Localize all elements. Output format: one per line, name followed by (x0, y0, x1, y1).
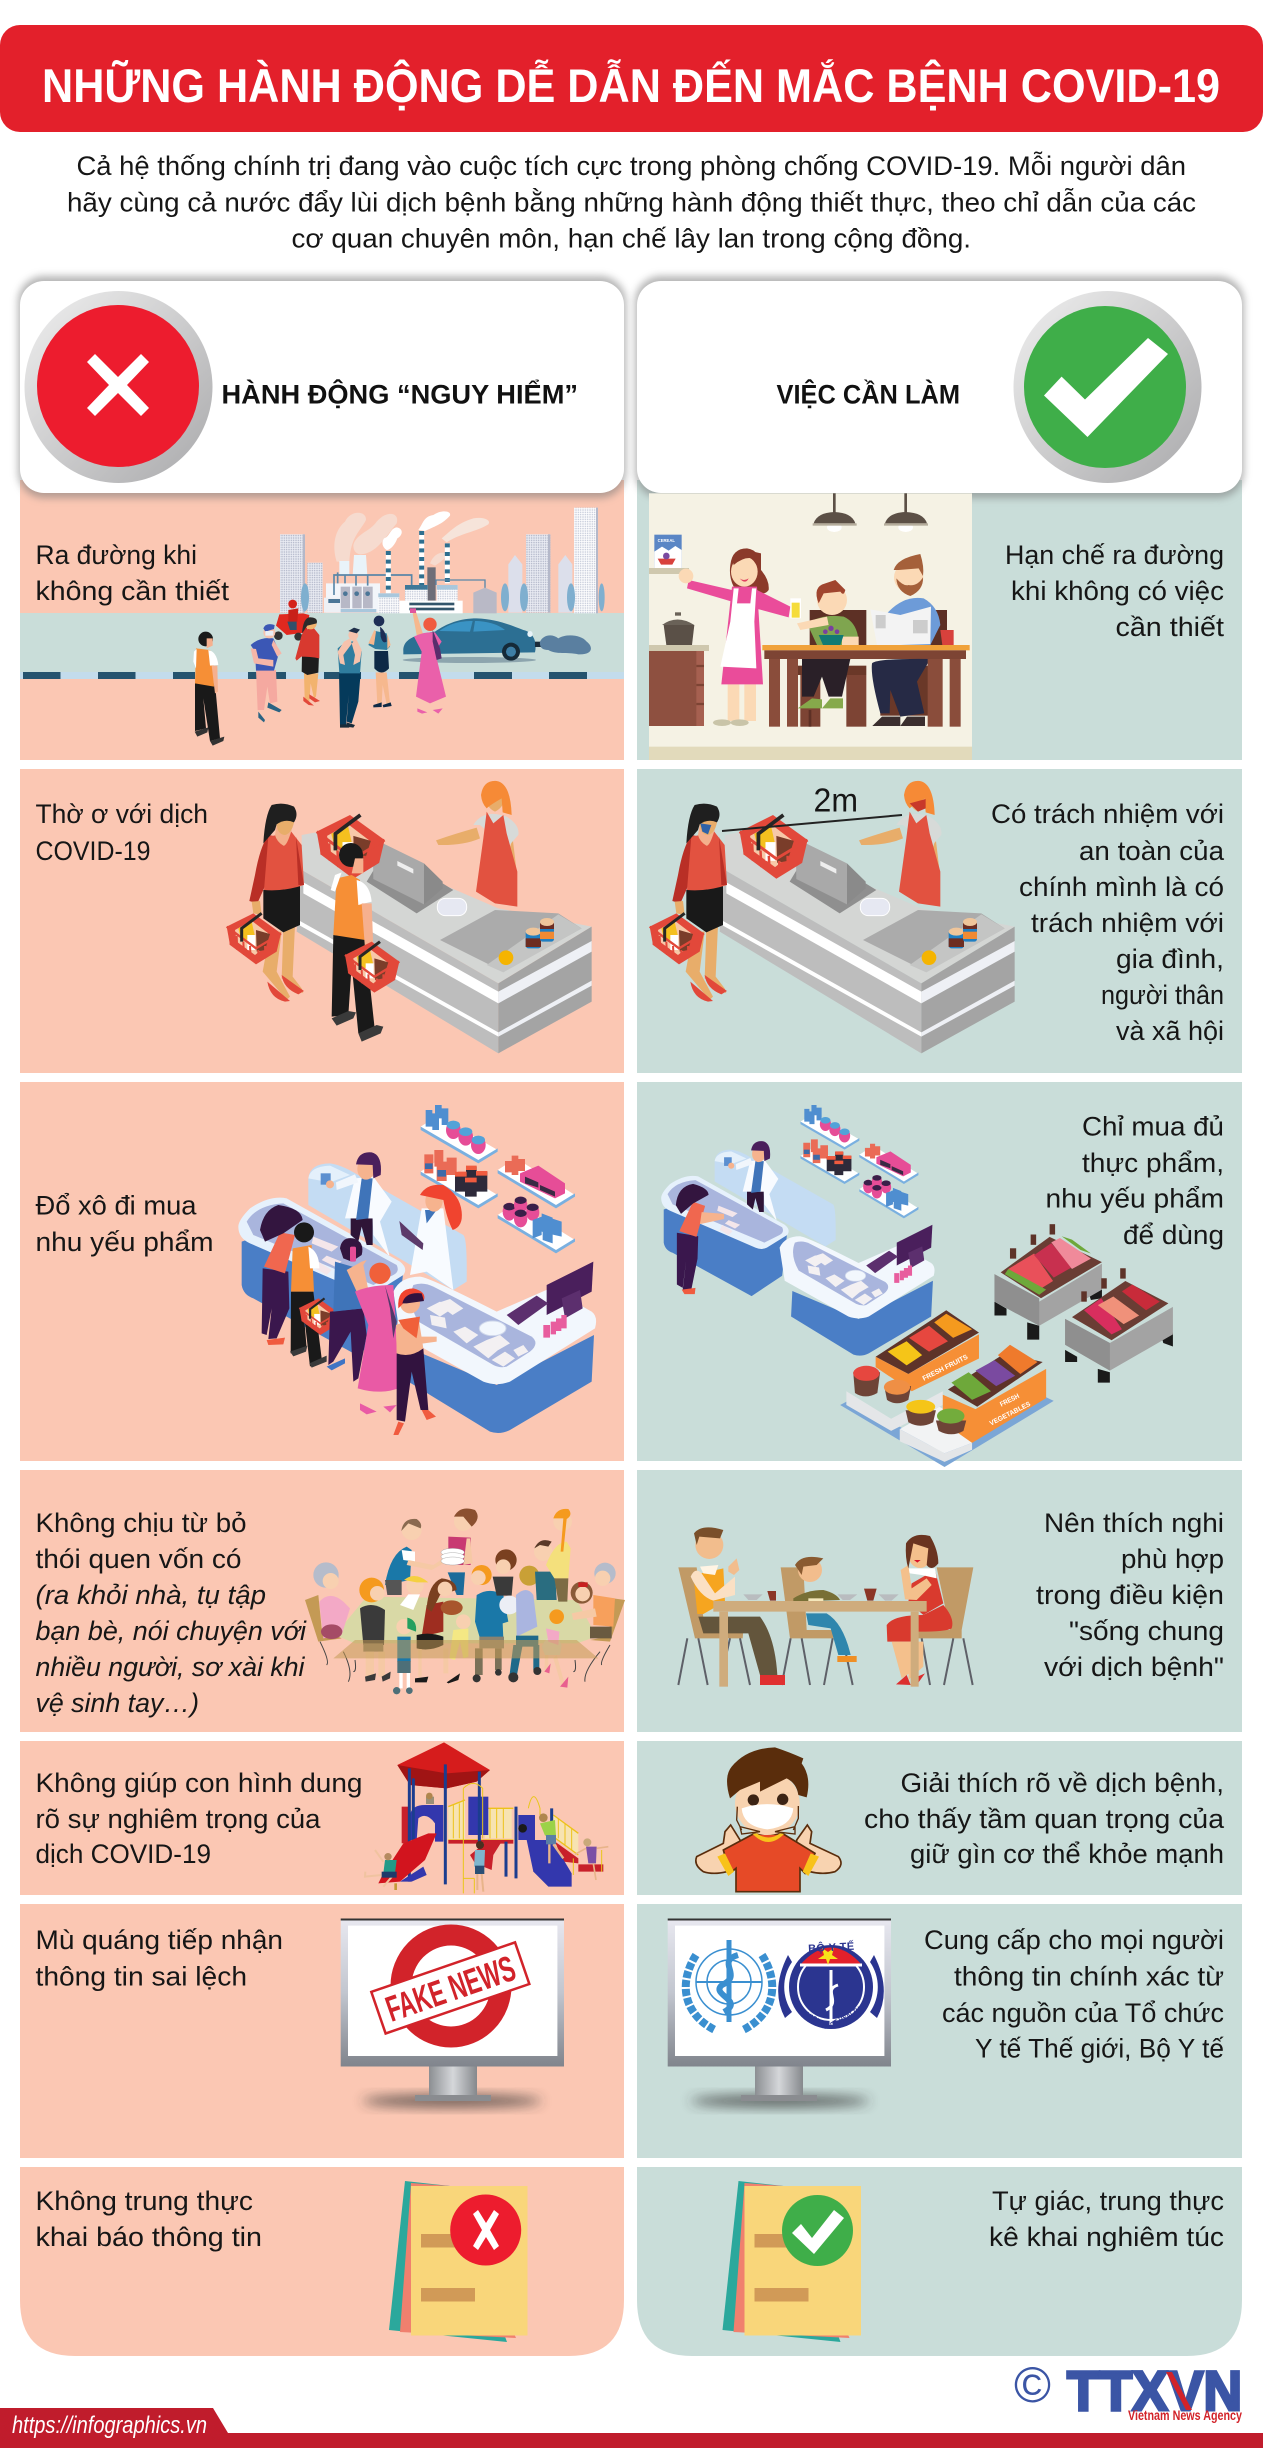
roof (397, 1742, 490, 1788)
illustration: big gathering around a table (305, 1508, 625, 1694)
pot and cabinet (649, 612, 709, 726)
footer bar (0, 2408, 1263, 2448)
butcher tables (994, 1224, 1173, 1383)
row 4 left text: bạn bè, nói chuyện với (36, 1616, 307, 1646)
health ministry logo (778, 1940, 884, 2032)
table and chairs (795, 610, 947, 727)
row 2 right text: và xã hội (1116, 1016, 1224, 1046)
row 3 left text: nhu yếu phẩm (36, 1227, 214, 1257)
row 2 left text: COVID-19 (36, 836, 150, 866)
row 4 left text: nhiều người, sơ xài khi (36, 1652, 305, 1682)
icon: declaration form with green check (722, 2181, 861, 2342)
checkout counter (720, 832, 1015, 1053)
tableware (743, 1589, 899, 1601)
head (735, 1772, 800, 1835)
row 4 left text: Không chịu từ bỏ (36, 1508, 246, 1538)
panel: left header card (18, 276, 626, 498)
table (713, 1601, 927, 1687)
fake news stamp (371, 1935, 529, 2037)
intro paragraph (67, 150, 1196, 254)
chairs and table (305, 1595, 625, 1682)
row 4 left text: thói quen vốn có (36, 1544, 242, 1574)
row 3 right text: thực phẩm, (1082, 1148, 1224, 1178)
mother in pink with apron (679, 548, 801, 726)
fresh produce stands: FRESH FRUITS (922, 1354, 970, 1383)
chairs (678, 1567, 973, 1638)
woman in dark red (415, 1578, 463, 1683)
woman with plates (441, 1508, 478, 1595)
masked man in teal shirt (338, 628, 362, 728)
pharmacy counters and shelves (238, 1105, 596, 1433)
intro paragraph: hãy cùng cả nước đẩy lùi dịch bệnh bằng những hành động thiết thực, theo chỉ dẫn của các (67, 186, 1196, 218)
woman in red top (295, 617, 320, 706)
row 4 right text: Nên thích nghi (1044, 1508, 1224, 1538)
blue stairs (527, 1840, 572, 1887)
row 4 left text: (ra khỏi nhà, tụ tập (36, 1580, 266, 1610)
row 3 right text: nhu yếu phẩm (1046, 1184, 1224, 1214)
mask (742, 1804, 793, 1829)
logo: TTXVN: © (1014, 2357, 1051, 2413)
row 5 right text: cho thấy tầm quan trọng của (864, 1804, 1225, 1834)
illustration: monitor with fake news stamp (341, 1918, 564, 2107)
woman with navy skirt (368, 616, 392, 707)
father with newspaper (870, 554, 961, 727)
illustration: family at home kitchen (649, 493, 972, 760)
fresh produce stands (840, 1310, 1054, 1467)
mask straps (737, 1806, 798, 1834)
woman with short hair (493, 1549, 519, 1614)
cereal box and shelf: CEREAL (658, 538, 675, 543)
right eye (777, 1794, 788, 1805)
ceiling lamps (813, 493, 928, 532)
row 6 right text: các nguồn của Tổ chức (942, 1998, 1224, 2028)
row 2 right text (991, 799, 1225, 1046)
row 2 right text: Có trách nhiệm với (991, 799, 1224, 829)
row 1 left text: Ra đường khi (36, 540, 197, 570)
row 3 left text: Đổ xô đi mua (36, 1190, 197, 1220)
row 2 left text (36, 799, 208, 866)
row 3 right text: Chỉ mua đủ (1082, 1112, 1224, 1142)
woman in pink dress (410, 608, 446, 714)
icon: red cross badge (24, 291, 212, 483)
man in orange vest (331, 843, 399, 1042)
woman in black leggings (393, 1288, 437, 1435)
child (793, 1557, 857, 1662)
cereal box and shelf (649, 535, 689, 574)
woman customer in blue mask (650, 804, 727, 1002)
illustration: street with factory, car and crowd (20, 508, 624, 746)
row 5 left text: Không giúp con hình dung (36, 1768, 362, 1798)
car with exhaust (403, 618, 591, 663)
cashier (436, 781, 519, 907)
illustration: crowded checkout counter (227, 781, 592, 1053)
row 7 left text: Không trung thực (36, 2186, 253, 2216)
slide (378, 1833, 437, 1890)
illustration: crowd at pharmacy (238, 1105, 596, 1435)
grandfather and girls right (542, 1563, 616, 1688)
health ministry logo: BỘ Y TẾ (808, 1940, 854, 1955)
man in orange vest with basket (290, 1222, 338, 1368)
row 4 right text: trong điều kiện (1036, 1580, 1224, 1610)
couple standing right (534, 1509, 572, 1602)
children (365, 1793, 608, 1892)
row 3 right text: để dùng (1123, 1220, 1224, 1250)
row 1 left text (36, 540, 230, 606)
woman in pink dress (347, 1260, 398, 1414)
row 4 right text: "sống chung (1069, 1616, 1224, 1646)
woman customer (227, 804, 304, 1002)
intro paragraph: Cả hệ thống chính trị đang vào cuộc tích cực trong phòng chống COVID-19. Mỗi người dân (76, 150, 1186, 181)
distance line and label (722, 782, 902, 831)
row 5 left text: rõ sự nghiêm trọng của (36, 1804, 322, 1834)
row 7 left text (36, 2186, 262, 2252)
row 5 left text (36, 1768, 362, 1869)
table (762, 645, 970, 727)
basket on counter (317, 815, 385, 879)
eyes (748, 1794, 759, 1806)
row 6 left text: thông tin sai lệch (36, 1962, 247, 1992)
row 6 right text: Cung cấp cho mọi người (924, 1925, 1224, 1955)
illustration: pharmacy with one customer and fresh food market (661, 1105, 1173, 1467)
row 6 left text: Mù quáng tiếp nhận (36, 1925, 283, 1955)
fresh produce stands: VEGETABLES (989, 1401, 1032, 1427)
posts (409, 1764, 552, 1884)
city skyline and factory (280, 508, 605, 613)
blonde man in lavender (508, 1566, 541, 1682)
man in orange vest (193, 632, 224, 746)
mother (887, 1535, 952, 1685)
fake news stamp: FAKE NEWS (380, 1947, 521, 2030)
illustration: monitor with WHO and health ministry logos (668, 1918, 891, 2107)
pharmacy counters and shelves (661, 1105, 935, 1356)
row 1 right text: khi không có việc (1011, 576, 1224, 606)
toddler in yellow (449, 1614, 471, 1660)
cashier in mask (859, 781, 942, 907)
row 5 left text: dịch COVID-19 (36, 1839, 211, 1869)
row 4 right text: với dịch bệnh" (1044, 1652, 1224, 1682)
row 2 right text: an toàn của (1079, 836, 1225, 866)
distance line and label: 2m (814, 782, 858, 818)
row 2 right text: chính mình là có (1019, 872, 1224, 902)
right heading: VIỆC CẦN LÀM (776, 378, 960, 410)
WHO logo (686, 1940, 772, 2030)
intro paragraph: cơ quan chuyên môn, hạn chế lây lan trong cộng đồng. (292, 224, 971, 254)
illustration: checkout counter with two metre distance (650, 781, 1015, 1053)
row 7 right text (989, 2186, 1224, 2252)
fresh produce stands: FRESH (999, 1393, 1021, 1409)
website url: https://infographics.vn (12, 2412, 207, 2439)
logo: TTXVN: TTXVN (1067, 2359, 1242, 2422)
delivery motorbike (274, 600, 309, 641)
row 1 right text (1005, 540, 1225, 642)
health ministry logo: MINISTRY (797, 2006, 831, 2032)
row 1 left text: không cần thiết (36, 576, 230, 606)
bench and food (333, 1640, 598, 1658)
chair legs (678, 1638, 973, 1685)
health ministry logo: OF HEALTH (828, 2005, 863, 2030)
row 6 right text: thông tin chính xác từ (954, 1962, 1224, 1992)
row 7 right text: kê khai nghiêm túc (989, 2222, 1224, 2252)
second pharmacist (399, 1185, 462, 1290)
row 4 right text: phù hợp (1121, 1544, 1224, 1574)
row 5 right text: Giải thích rõ về dịch bệnh, (900, 1768, 1224, 1798)
basket on counter (740, 815, 808, 879)
row 4 right text (1036, 1508, 1224, 1682)
row 4 left text (36, 1508, 307, 1718)
left heading: HÀNH ĐỘNG “NGUY HIỂM” (222, 378, 578, 410)
row 6 right text: Y tế Thế giới, Bộ Y tế (975, 2034, 1224, 2064)
row 3 right text (1046, 1112, 1224, 1250)
row 7 left text: khai báo thông tin (36, 2222, 262, 2252)
illustration: playground (365, 1742, 608, 1893)
row 5 right text (864, 1768, 1225, 1869)
t-shirt (723, 1834, 815, 1892)
yellow ladders (463, 1783, 602, 1893)
row 1 right text: Hạn chế ra đường (1005, 540, 1224, 570)
structure (402, 1797, 603, 1872)
man in blue shirt (251, 624, 282, 722)
row 6 left text (36, 1925, 283, 1992)
illustration: boy putting on mask (696, 1747, 841, 1892)
boy passing plates (385, 1519, 443, 1595)
arms (696, 1825, 841, 1873)
row 2 right text: người thân (1101, 980, 1224, 1010)
grandmother (313, 1562, 350, 1639)
row 5 right text: giữ gìn cơ thể khỏe mạnh (910, 1839, 1224, 1869)
small blonde child and boy in blue (393, 1576, 428, 1694)
customer with curly hair (260, 1205, 303, 1345)
row 6 right text (924, 1925, 1224, 2064)
hair (727, 1747, 808, 1798)
man in blue from behind (471, 1565, 508, 1682)
row 4 left text: vệ sinh tay…) (36, 1688, 199, 1718)
panel: left column row backgrounds (20, 480, 624, 2356)
single customer (676, 1184, 724, 1294)
customer in blue with phone (327, 1238, 367, 1382)
icon: green check badge (1014, 291, 1202, 483)
father (691, 1527, 785, 1685)
row 2 right text: trách nhiệm với (1031, 908, 1224, 938)
row 1 right text: cần thiết (1116, 612, 1225, 642)
boy (797, 580, 859, 708)
row 2 left text: Thờ ơ với dịch (36, 799, 208, 829)
icon: declaration form with red cross (389, 2181, 528, 2342)
checkout counter (297, 832, 592, 1053)
panel: right column row backgrounds (637, 480, 1242, 2356)
woman with orange hair in black (359, 1578, 391, 1682)
row 7 right text: Tự giác, trung thực (992, 2186, 1224, 2216)
row 2 right text: gia đình, (1116, 944, 1224, 974)
panel: right header card (635, 276, 1244, 498)
title banner (0, 25, 1263, 132)
row 3 left text (36, 1190, 214, 1257)
illustration: family praying at table (678, 1527, 973, 1687)
collar and sleeves (717, 1833, 819, 1876)
